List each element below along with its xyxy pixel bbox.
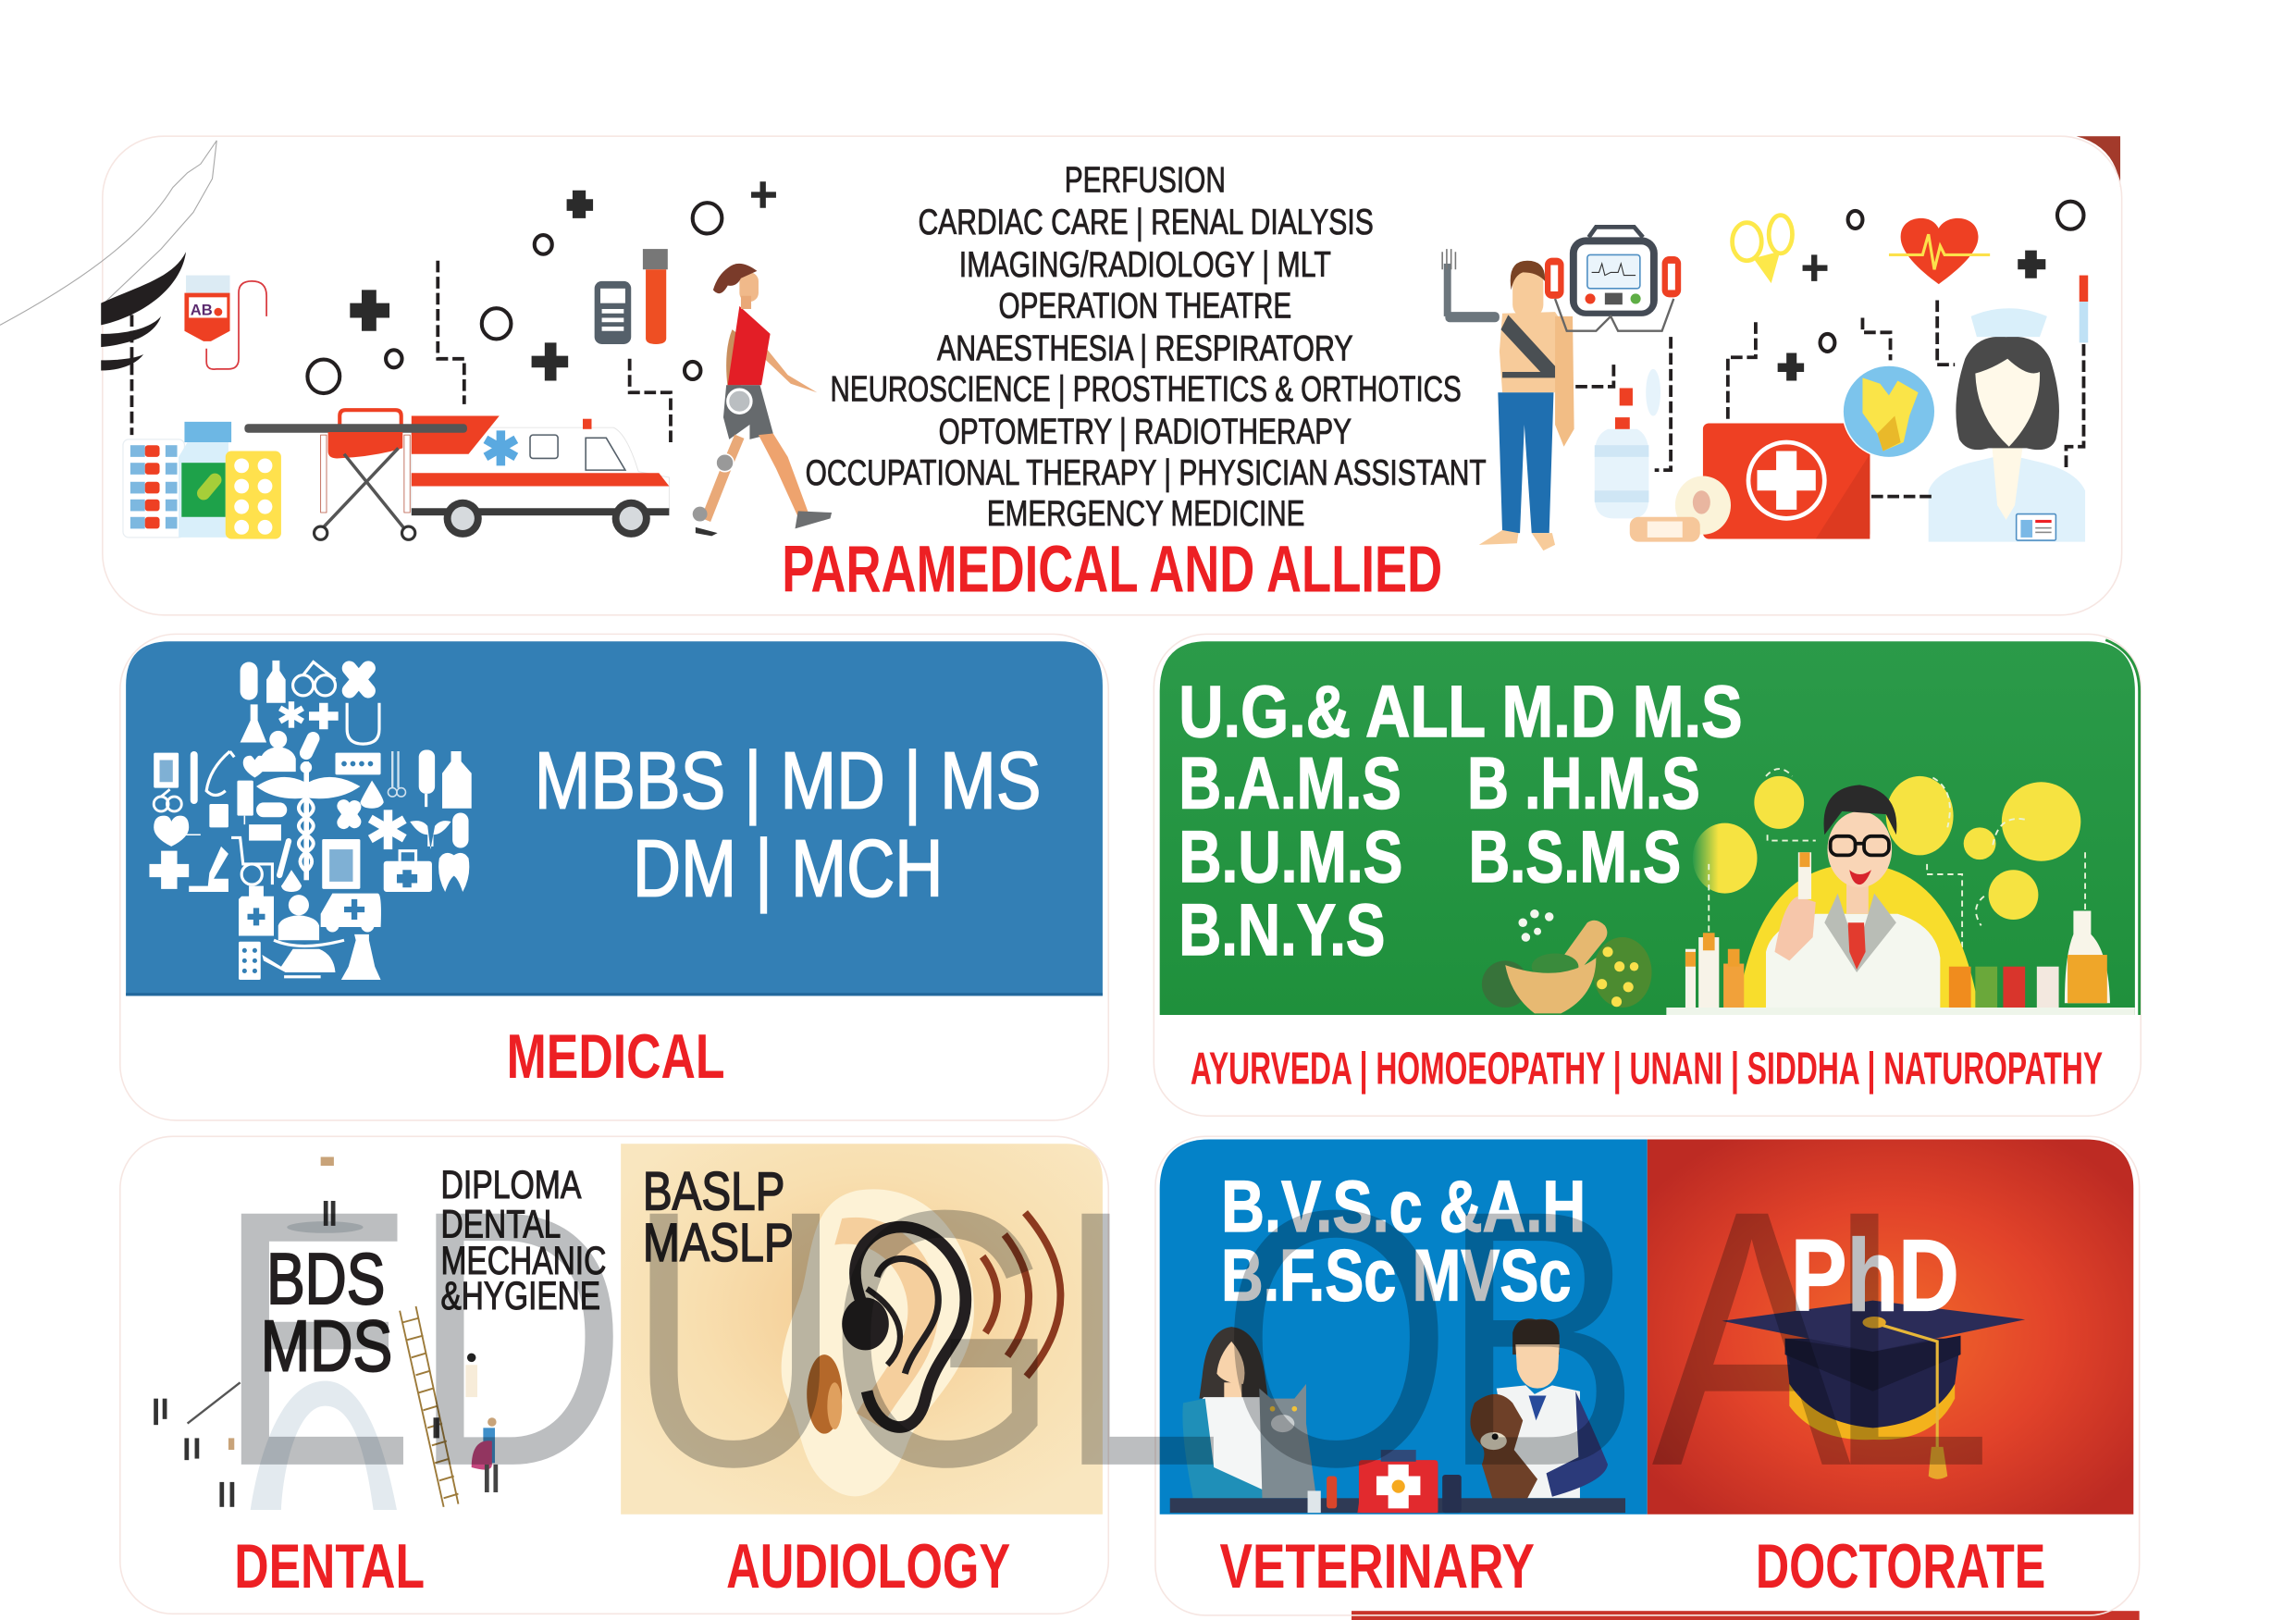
icon cluster: white medical symbols in a cross [149,658,472,980]
text: BASLP MASLP: MASLP [643,1213,794,1273]
text block: course list: NEUROSCIENCE | PROSTHETICS & ORTHOTICS [831,370,1462,410]
text block: degrees on green: B.A.M.S [1179,742,1401,824]
icon: hearing symbol [842,1227,966,1428]
illustrations: tiny dental workers [154,1156,498,1507]
text: BASLP MASLP: BASLP [643,1161,784,1221]
text: vet degrees: B.V.S.c &A.H [1221,1165,1586,1247]
label: doctorate: DOCTORATE [1756,1531,2045,1601]
text block: course list: CARDIAC CARE | RENAL DIALYSIS [918,203,1374,242]
icons: medical crosses left [350,181,776,381]
text: diploma course: DIPLOMA [440,1163,582,1207]
illustration: man vet with dog [1470,1318,1608,1507]
figure: man with prosthetic arm [1442,249,1574,550]
label: audiology: AUDIOLOGY [726,1531,1010,1601]
text block: degrees on green: U.G.& ALL M.D M.S [1179,670,1743,752]
text block: course list: OPERATION THEATRE [999,286,1291,326]
panel: veterinary and doctorate [1155,1136,2140,1620]
icon: flashlight [643,249,668,344]
text: diploma course [440,1163,606,1318]
icon: oxygen bottle [1595,369,1660,518]
text: PhD: PhD [1791,1219,1959,1333]
text block: degrees on green: B.U.M.S [1179,815,1402,897]
connector dashes left [131,261,671,444]
text: BDS MDS: BDS [266,1240,385,1319]
illustration: mortar and herbs [1482,909,1652,1013]
panel: ayurveda and allied systems [1154,634,2141,1116]
icon: ambulance [412,416,669,538]
illustration: vet table and kit [1170,1450,1625,1513]
figure: walking woman with exoskeleton [693,264,832,536]
text block: degrees on green: B.N.Y.S [1179,888,1385,971]
icons: medical crosses right [1778,251,2045,381]
illustration: ear [782,1189,974,1496]
icon: stretcher [244,410,467,539]
text: vet degrees [1221,1165,1586,1317]
panel: medical [120,634,1108,1120]
panel: doctorate image [1648,1139,2133,1515]
icon: blood bag: AB [191,301,213,318]
illustration: bottles [1685,911,2110,1008]
illustration: yellow molecule circles [1693,769,2085,1003]
panel: audiology image [621,1144,1103,1515]
icon: bandage and tape [1630,476,1731,542]
text block: degrees on green [1179,670,1743,971]
icons: rings left [307,203,722,393]
text: BDS MDS [261,1240,392,1387]
panel: veterinary image [1160,1139,1648,1515]
text: DM MCH: DM | MCH [633,824,943,914]
text: BASLP MASLP [643,1161,794,1273]
decorative swoosh at left edge [0,141,216,370]
label: dental: DENTAL [234,1531,425,1601]
label: veterinary: VETERINARY [1220,1531,1535,1601]
icon: syringe [2080,276,2088,342]
icon: handheld meter [595,281,631,344]
icon: gloves badge [1842,365,1936,458]
icon: medicine bottle [179,422,231,538]
text block: course list: OCCUPATIONAL THERAPY | PHYSICIAN ASSISTANT [806,453,1487,493]
text: vet degrees: B.F.Sc MVSc [1221,1234,1571,1317]
icon: first aid kit [1703,423,1870,539]
icon: scissors [1733,216,1792,278]
text block: degrees on green: B .H.M.S [1467,742,1700,824]
text block: course list: PERFUSION [1065,160,1226,200]
connector dashes right [1575,300,2083,497]
illustration: woman vet with cat [1182,1327,1316,1500]
text: diploma course: DENTAL [440,1203,561,1247]
icon: sound waves [982,1213,1060,1377]
icon: defibrillator [1545,227,1681,331]
text: BDS MDS: MDS [261,1307,392,1387]
label: medical: MEDICAL [507,1021,725,1092]
illustration: doctor with test tube [1736,785,1980,1013]
text block: course list: ANAESTHESIA | RESPIRATORY [937,328,1353,368]
text: MBBS MD MS: MBBS | MD | MS [535,736,1041,826]
icon: blood bag [184,276,266,369]
figure: nurse [1929,308,2085,542]
text: diploma course: MECHANIC [440,1239,606,1283]
text block: course list [806,160,1487,534]
illustration: ladder [400,1306,458,1507]
illustration: graduation cap [1722,1301,2025,1479]
icon: heart with pulse [1889,218,1990,284]
text block: course list: OPTOMETRY | RADIOTHERAPY [939,413,1352,452]
panel: dental and audiology [120,1136,1108,1614]
heading: paramedical and allied: PARAMEDICAL AND ALLIED [782,533,1442,606]
icon: pill blister [123,439,184,538]
text block: degrees on green: B.S.M.S [1469,815,1681,897]
text block: course list: IMAGING/RADIOLOGY | MLT [959,245,1331,285]
text block: course list: EMERGENCY MEDICINE [987,494,1304,534]
watermark: EDUGLOBAL [216,1135,1993,1542]
icon: yellow tablet strip [226,451,281,539]
icons: rings right [1821,202,2083,352]
white floor strip [1666,1008,2135,1015]
illustration: tooth arch [251,1381,397,1510]
panel: paramedical and allied [0,136,2122,615]
text: diploma course: &HYGIENE [440,1274,600,1318]
